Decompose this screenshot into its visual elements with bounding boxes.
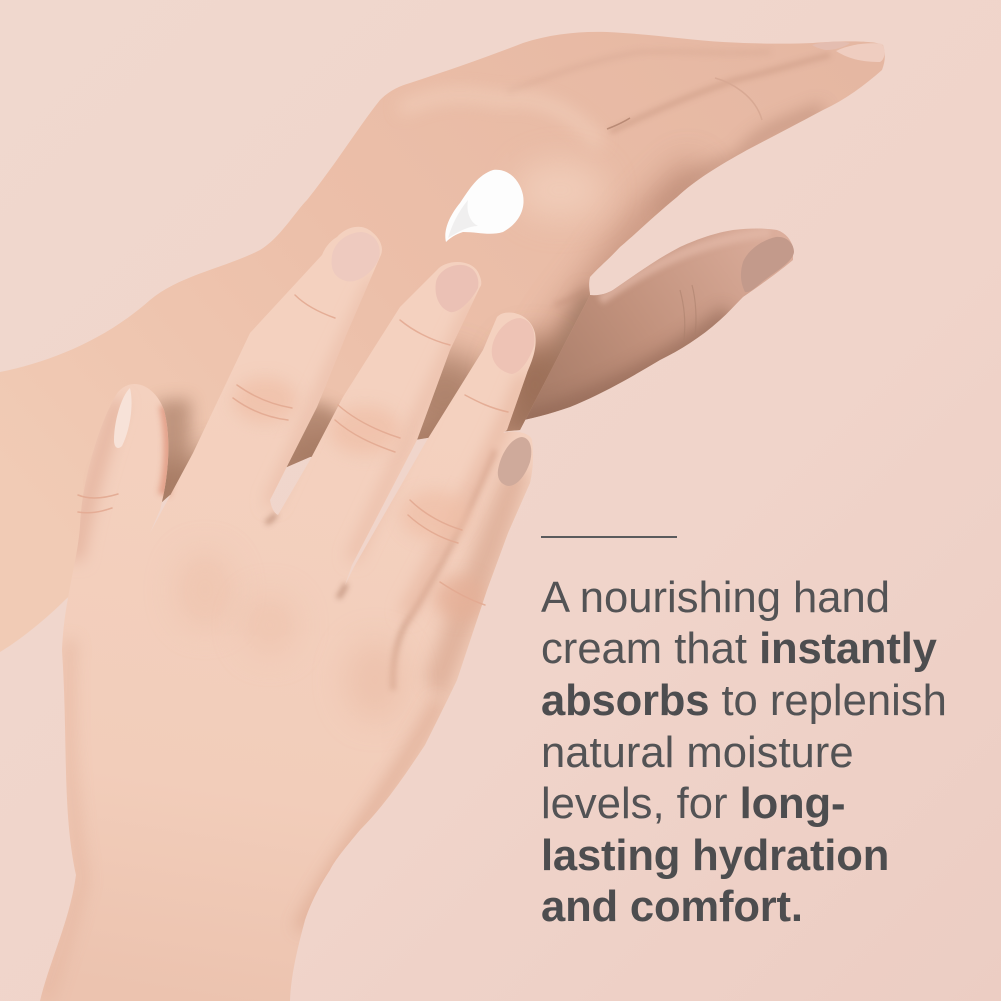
middle nail <box>436 265 478 312</box>
thumb nail <box>114 388 132 448</box>
description text: levels, for long- <box>541 780 845 828</box>
upper hand and forearm <box>0 32 885 652</box>
upper hand thumb <box>526 228 793 420</box>
fingernail: upper hand ring finger <box>812 42 850 50</box>
knuckle blushes <box>233 378 297 422</box>
divider rule <box>541 536 677 538</box>
index nail <box>332 232 380 281</box>
description text: lasting hydration <box>541 832 889 880</box>
description text <box>541 574 947 931</box>
knuckle creases <box>78 295 508 605</box>
description text: and comfort. <box>541 883 803 931</box>
description text: absorbs to replenish <box>541 677 947 725</box>
lower hand shading <box>62 283 531 938</box>
fingernail: upper thumb <box>741 237 794 292</box>
lower hand shape <box>40 227 536 1001</box>
ring nail <box>492 318 534 374</box>
description text: A nourishing hand <box>541 574 890 622</box>
illustration: upper hand with cream <box>0 32 885 652</box>
little nail <box>498 437 531 486</box>
fingernails lower hand <box>114 232 534 486</box>
upper hand shading <box>120 52 830 510</box>
description text: natural moisture <box>541 729 854 777</box>
description text: cream that instantly <box>541 625 938 673</box>
illustration: lower hand <box>40 227 536 1001</box>
cream dollop <box>445 170 524 242</box>
fingernail: upper hand index finger <box>836 43 885 62</box>
